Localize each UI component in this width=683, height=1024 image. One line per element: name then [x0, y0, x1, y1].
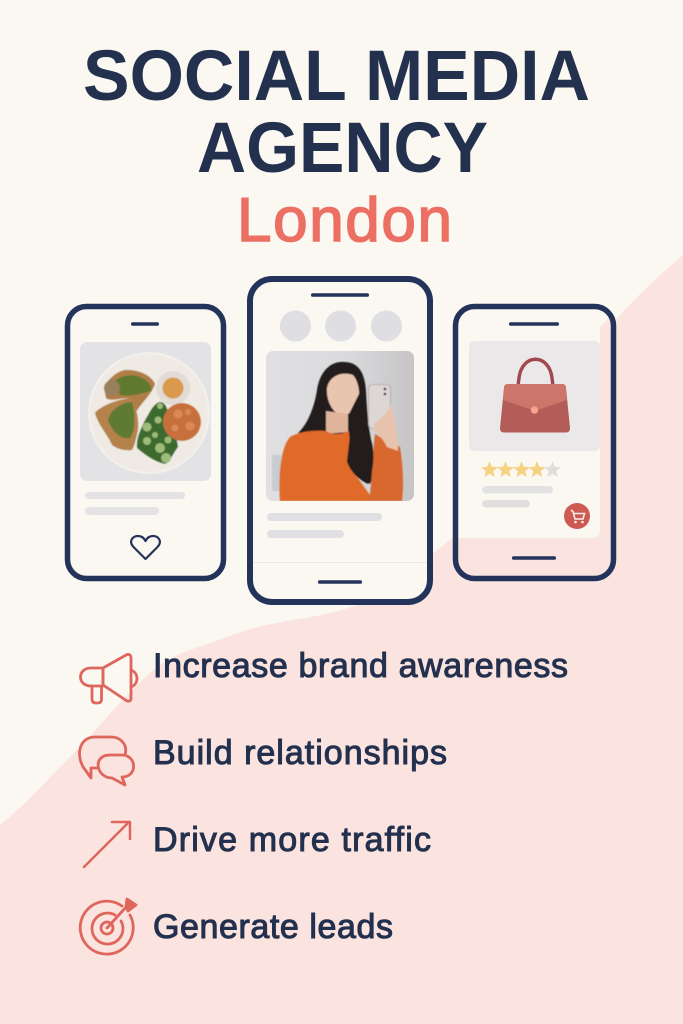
- benefit: brand awareness: [80, 647, 568, 703]
- icon: cart button: [564, 503, 590, 529]
- title: SOCIAL MEDIA: [83, 37, 590, 116]
- benefit: relationships: [80, 734, 447, 785]
- phone: food post: [68, 306, 224, 578]
- product card: [458, 309, 618, 538]
- star rating: [481, 461, 561, 477]
- speaker and home bar: [509, 322, 559, 326]
- food photo: [80, 342, 211, 481]
- text placeholders: [85, 492, 185, 499]
- title: AGENCY: [197, 109, 488, 188]
- icon: handbag: [500, 359, 570, 432]
- benefit: relationships: Build relationships: [153, 734, 447, 772]
- icon: heart: [131, 536, 160, 559]
- benefit: traffic: Drive more traffic: [153, 821, 431, 859]
- benefit: traffic: [84, 821, 431, 867]
- speaker: [311, 293, 369, 297]
- subtitle: London: London: [237, 186, 452, 255]
- phone: selfie post: [250, 279, 430, 602]
- benefit: leads: [80, 899, 393, 954]
- speaker: [131, 322, 159, 326]
- title: [83, 37, 590, 188]
- selfie photo: [266, 351, 414, 501]
- icon: arrow: [84, 822, 130, 867]
- text placeholders: [267, 513, 382, 521]
- phone: shop post: [456, 306, 618, 578]
- benefit: brand awareness: Increase brand awareness: [153, 647, 568, 685]
- icon: megaphone: [80, 654, 137, 703]
- icon: speech bubbles: [80, 737, 134, 785]
- icon: target: [80, 899, 136, 954]
- story circles: [280, 310, 402, 342]
- text placeholders: [482, 486, 553, 494]
- divider and home bar: [253, 562, 427, 563]
- phone frame: [456, 306, 614, 578]
- benefit: leads: Generate leads: [153, 908, 393, 946]
